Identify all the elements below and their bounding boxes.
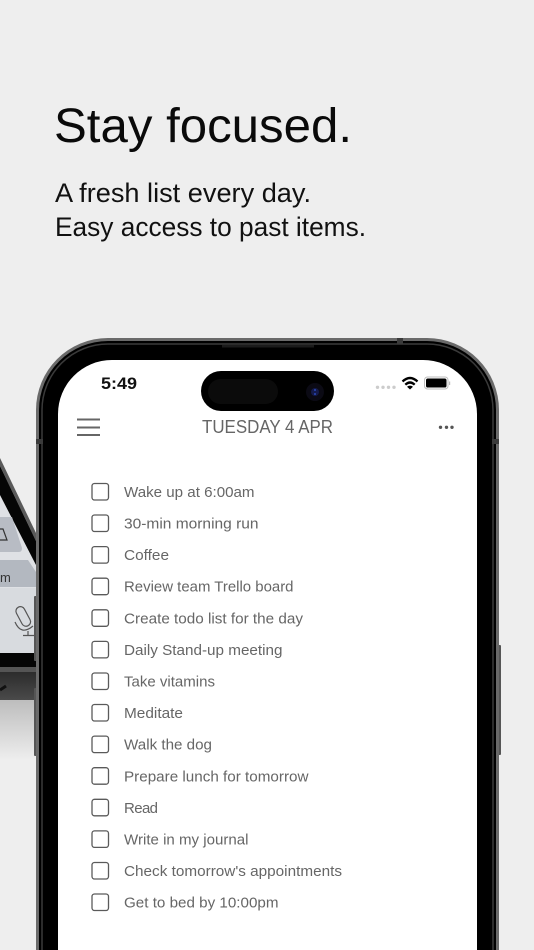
list items: Read (124, 800, 158, 817)
date title: TUESDAY 4 APR (202, 417, 333, 437)
list items (124, 484, 342, 912)
list items: Write in my journal (124, 832, 248, 848)
heading: Stay focused. (54, 100, 352, 153)
background phone, partly hidden (0, 458, 36, 760)
icon: hamburger menu (77, 420, 100, 435)
icon: microphone (14, 605, 34, 636)
list items: Walk the dog (124, 737, 212, 754)
list items: Coffee (124, 547, 169, 564)
status bar time: 5:49 (101, 374, 137, 393)
list items: Take vitamins (124, 674, 215, 690)
list items: Wake up at 6:00am (124, 484, 254, 501)
list items: Get to bed by 10:00pm (124, 895, 278, 912)
list items: Create todo list for the day (124, 610, 303, 627)
subheading (55, 178, 366, 242)
dynamic island (201, 371, 334, 411)
list items: Prepare lunch for tomorrow (124, 768, 309, 785)
icon: keyboard key glyph (0, 529, 7, 540)
icon: signal dots (376, 386, 396, 389)
list items: 30-min morning run (124, 516, 258, 532)
list items: Daily Stand-up meeting (124, 642, 282, 659)
checkboxes (92, 484, 108, 910)
subheading: A fresh list every day. (55, 178, 311, 208)
icon: battery (424, 377, 450, 389)
icon: more menu (439, 426, 454, 429)
phone screen (58, 360, 477, 950)
icon: wifi (402, 378, 418, 390)
list items: Meditate (124, 705, 183, 722)
todo list (92, 484, 342, 912)
list items: Review team Trello board (124, 579, 294, 596)
list items: Check tomorrow's appointments (124, 863, 342, 880)
background phone, partly hidden: m (0, 570, 11, 585)
phone frame (36, 338, 499, 950)
subheading: Easy access to past items. (55, 212, 366, 242)
phone side buttons (34, 596, 501, 756)
